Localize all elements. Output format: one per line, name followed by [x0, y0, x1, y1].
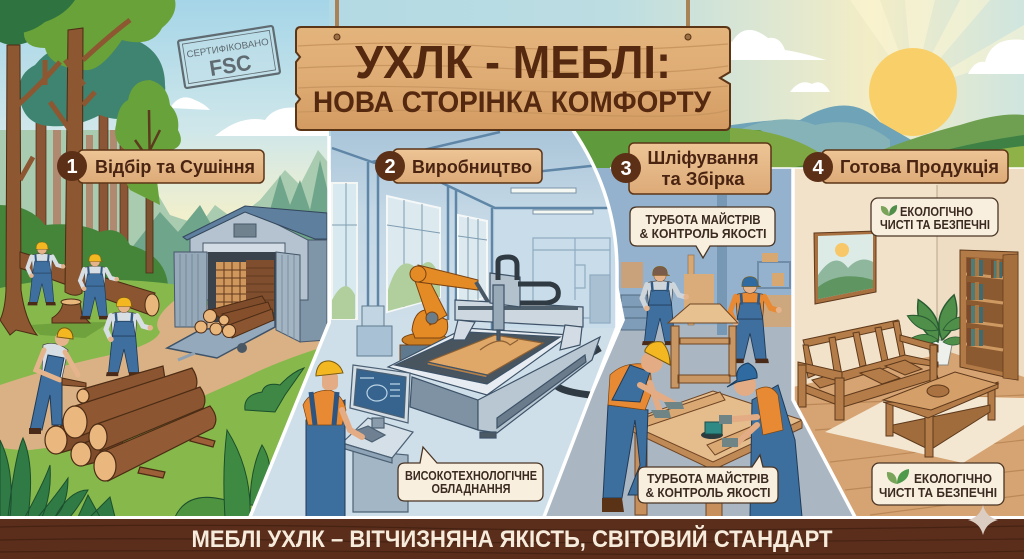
- left door: [174, 252, 207, 327]
- ceiling lights: [511, 188, 593, 214]
- step label 4: Готова Продукція: [840, 157, 999, 177]
- log pile: [45, 366, 216, 481]
- step label 2: 2: [384, 156, 396, 178]
- cable chain: [498, 257, 517, 280]
- step label 2: Виробництво: [412, 157, 532, 177]
- step label 3: та Збірка: [662, 169, 745, 189]
- stamp: FSC certified: СЕРТИФІКОВАНО: [186, 37, 270, 61]
- teal foliage: [19, 37, 165, 126]
- factory floor: [250, 310, 620, 517]
- spindle: [493, 285, 504, 330]
- desk: [342, 418, 413, 458]
- ceiling beams: [332, 132, 617, 330]
- shelves: [966, 274, 1003, 350]
- back worker right: [730, 277, 782, 363]
- CNC machine: [388, 257, 600, 438]
- scene: hills and sun: [570, 0, 1024, 170]
- worker 1: [27, 242, 65, 305]
- monitor stand: [372, 418, 384, 428]
- middle window: [387, 196, 440, 312]
- lumber stack: [216, 262, 246, 312]
- shed roof: [183, 206, 327, 240]
- worker 3: [106, 297, 153, 376]
- sign board: [296, 27, 730, 130]
- dark foliage: [0, 32, 28, 44]
- door opening: [208, 252, 276, 322]
- sun rays: [850, 0, 1024, 90]
- step label 1: [57, 150, 264, 183]
- icon: leaves: [881, 205, 897, 216]
- panel: step 3 workshop: [540, 168, 860, 520]
- floor cable chain: [554, 348, 600, 395]
- callout: eco bottom: ЧИСТІ ТА БЕЗПЕЧНІ: [879, 486, 997, 500]
- sander: [701, 422, 723, 439]
- callout: craftsmen care top: [630, 207, 775, 258]
- step label 4: [803, 150, 1008, 183]
- bed rim: [388, 328, 570, 395]
- callout: craftsmen care top: & КОНТРОЛЬ ЯКОСТІ: [640, 227, 766, 241]
- light foliage: [24, 0, 175, 70]
- title line 1: УХЛК - МЕБЛІ:: [355, 36, 671, 88]
- cart platform: [167, 320, 275, 358]
- step label 2: [375, 149, 542, 183]
- title line 2: НОВА СТОРІНКА КОМФОРТУ: [313, 86, 711, 119]
- left wall: [793, 168, 937, 408]
- step label 3: Шліфування: [648, 148, 758, 168]
- plant: [905, 293, 974, 365]
- step label 3: [611, 143, 771, 194]
- control station: [342, 365, 413, 512]
- callout: craftsmen care top: ТУРБОТА МАЙСТРІВ: [646, 212, 760, 227]
- wood panel: [427, 335, 543, 378]
- worker 4: [29, 328, 86, 434]
- small cabinet: [357, 306, 392, 356]
- right window: [458, 215, 487, 306]
- foreground plants: [0, 368, 304, 517]
- step label 3: 3: [620, 158, 632, 180]
- step label 1: Відбір та Сушіння: [95, 157, 255, 177]
- sun: [869, 48, 957, 136]
- mountain: [700, 105, 960, 170]
- gantry beam: [455, 300, 583, 327]
- step label 4: 4: [812, 157, 824, 179]
- callout: eco top: [871, 198, 998, 236]
- coffee table: [883, 372, 998, 457]
- carriage: [490, 273, 520, 307]
- green hills: [570, 130, 850, 168]
- carried log and stump: [20, 252, 159, 323]
- operator: [303, 361, 362, 517]
- panel: step 4 finished product: [793, 168, 1024, 517]
- front worker right: [719, 363, 802, 517]
- panel: step 1 forest: [0, 0, 330, 517]
- forest sky: [0, 0, 329, 221]
- panel: step 2 factory: [250, 130, 620, 517]
- base foot: [480, 432, 496, 438]
- front table: [625, 391, 802, 517]
- grass: [0, 279, 330, 517]
- icon: leaves: [887, 469, 909, 484]
- sofa frame: [798, 320, 938, 420]
- door frame: [203, 243, 285, 253]
- title sign: [296, 27, 730, 130]
- logs on cart: [195, 296, 274, 338]
- rug: [825, 395, 1024, 463]
- distant forest: [0, 130, 328, 246]
- stamp: FSC certified: [178, 26, 280, 88]
- monitor: [350, 365, 410, 423]
- clouds: [706, 30, 1024, 92]
- dirt path: [0, 300, 330, 450]
- callout: eco bottom: ЕКОЛОГІЧНО: [914, 472, 992, 486]
- worker 2: [80, 254, 119, 319]
- bookcase: [960, 250, 1018, 380]
- background cabinets: [621, 253, 792, 330]
- back room machines: [533, 238, 610, 323]
- back tree trunks: [53, 130, 117, 232]
- green tree: [115, 80, 181, 273]
- left trunk and branches: [0, 45, 37, 335]
- step label 1: 1: [66, 156, 78, 178]
- clouds: [170, 97, 330, 136]
- gantry legs: [453, 320, 475, 340]
- back table: [668, 304, 738, 388]
- base right: [478, 337, 600, 433]
- sparkle: [968, 505, 998, 535]
- sky background: [0, 0, 1024, 170]
- bed: [395, 332, 560, 384]
- right wall: [937, 168, 1024, 388]
- column: [717, 195, 727, 335]
- callout: high-tech equipment: ВИСОКОТЕХНОЛОГІЧНЕ: [405, 469, 537, 483]
- panel dividers: [250, 130, 855, 517]
- background wood boards: [621, 255, 714, 325]
- painting: [814, 231, 876, 304]
- robot arm: [400, 265, 488, 363]
- banner text: МЕБЛІ УХЛК – ВІТЧИЗНЯНА ЯКІСТЬ, СВІТОВИЙ СТАНДАРТ: [192, 525, 833, 553]
- base front: [410, 377, 478, 430]
- main trunk and branches: [50, 20, 130, 295]
- callout: craftsmen care bottom: & КОНТРОЛЬ ЯКОСТІ: [646, 486, 770, 500]
- shed side wall: [300, 240, 327, 342]
- wood floor: [793, 352, 1024, 517]
- workshop floor: [540, 325, 860, 520]
- front worker left: [602, 342, 684, 512]
- workshop wall: [590, 168, 795, 368]
- left window: [332, 183, 357, 319]
- back worker left: [642, 266, 689, 345]
- workers in forest: [27, 242, 153, 434]
- callout: eco top: ЕКОЛОГІЧНО: [900, 205, 973, 219]
- vent: [234, 224, 256, 237]
- bushes: [0, 205, 168, 288]
- cabinet: [353, 450, 408, 512]
- rope left: [335, 0, 339, 30]
- callout: craftsmen care bottom: [638, 455, 778, 503]
- bottom banner: [0, 505, 1024, 559]
- right door: [276, 252, 300, 342]
- callout: high-tech equipment: ОБЛАДНАННЯ: [432, 482, 511, 496]
- nails: [334, 34, 340, 40]
- shed front wall: [190, 208, 308, 300]
- factory wall: [250, 130, 620, 330]
- callout: high-tech equipment: [398, 447, 543, 501]
- stamp: FSC certified: FSC: [208, 50, 253, 81]
- rope right: [686, 0, 690, 30]
- back room: [495, 208, 617, 328]
- keyboard: [352, 426, 385, 442]
- callout: eco bottom: [872, 463, 1004, 505]
- shed: [167, 206, 327, 360]
- callout: eco top: ЧИСТІ ТА БЕЗПЕЧНІ: [880, 218, 990, 232]
- callout: craftsmen care bottom: ТУРБОТА МАЙСТРІВ: [647, 471, 769, 486]
